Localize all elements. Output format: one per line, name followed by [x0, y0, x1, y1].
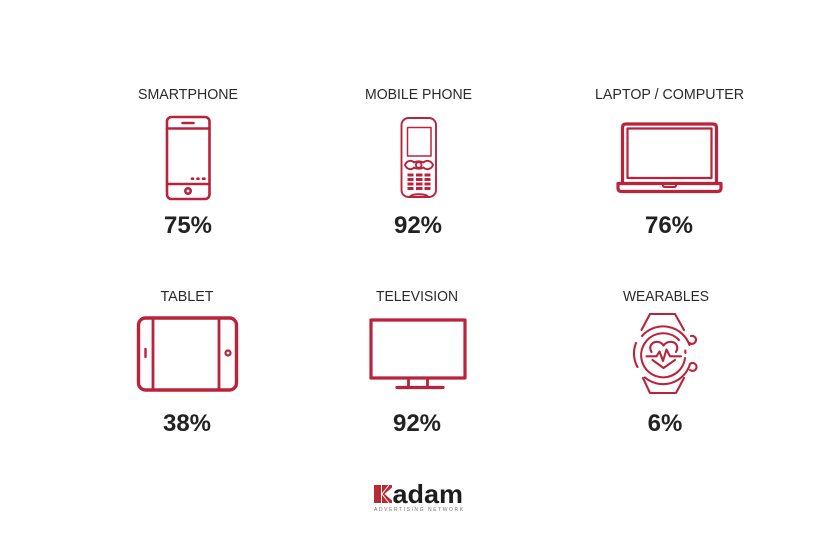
panel: wearables — [623, 289, 709, 437]
icon: mobile phone — [402, 118, 436, 197]
icon: laptop — [618, 124, 721, 192]
value: tablet: 38% — [163, 410, 211, 437]
logo wordmark: adam — [392, 479, 463, 509]
heading: wearables: WEARABLES — [623, 289, 709, 305]
panel: mobile phone — [365, 87, 472, 239]
panel: tablet — [138, 289, 236, 437]
heading: smartphone: SMARTPHONE — [138, 87, 238, 103]
logo: kadam — [374, 479, 464, 513]
panel: smartphone — [138, 87, 238, 239]
heading: mobile phone: MOBILE PHONE — [365, 87, 472, 103]
heading: laptop: LAPTOP / COMPUTER — [595, 87, 744, 103]
icon: television — [371, 320, 465, 388]
logo mark: k — [374, 485, 392, 503]
value: television: 92% — [393, 410, 441, 437]
logo tagline: ADVERTISING NETWORK — [374, 507, 464, 513]
value: smartphone: 75% — [164, 212, 212, 239]
icon: smartphone — [167, 117, 210, 199]
value: laptop: 76% — [645, 212, 693, 239]
icon: tablet — [138, 318, 236, 390]
heading: tablet: TABLET — [160, 289, 214, 305]
value: mobile phone: 92% — [394, 212, 442, 239]
panel: television — [371, 289, 465, 437]
value: wearables: 6% — [648, 410, 682, 437]
heading: television: TELEVISION — [376, 289, 458, 305]
icon: smartwatch — [634, 314, 697, 393]
panel: laptop — [595, 87, 744, 239]
